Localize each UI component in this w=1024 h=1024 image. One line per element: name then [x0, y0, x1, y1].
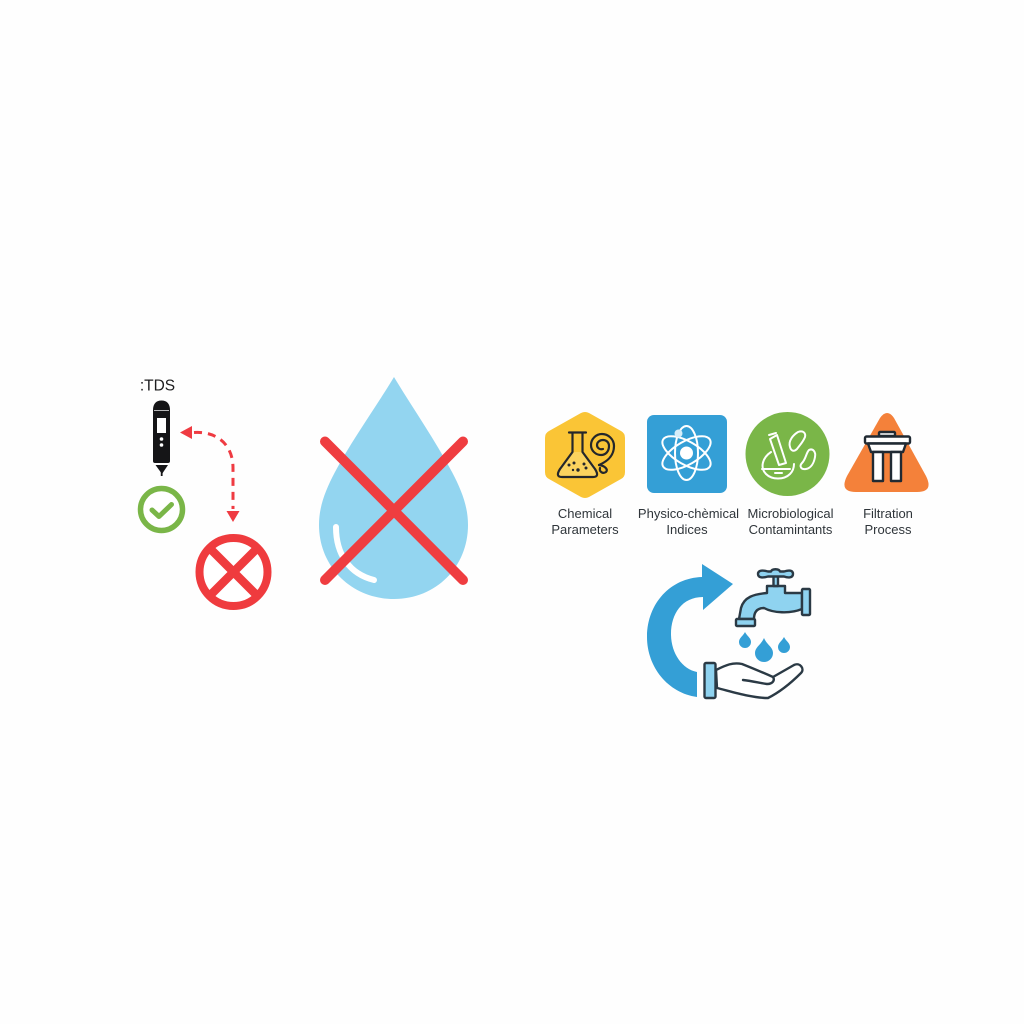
panel: filtration process [844, 413, 929, 537]
panel: TDS meter test [140, 378, 268, 606]
red cross [325, 442, 463, 580]
icon: open hand [704, 663, 802, 698]
icon: orange triangle [844, 413, 929, 492]
panel: chemical parameters [545, 412, 625, 537]
drop highlight [336, 527, 374, 580]
label: Chemical Parameters [551, 506, 619, 537]
panel: microbiological contaminants [746, 412, 834, 537]
panel: physico-chemical indices [638, 415, 739, 537]
label: Filtration Process [863, 506, 913, 537]
TDS label: :TDS [140, 378, 175, 394]
label: Filtration Process: Process [865, 522, 912, 537]
icon: red cross circle [200, 538, 268, 606]
label: Chemical Parameters: Parameters [551, 522, 619, 537]
icon: flask and spiral [558, 432, 614, 477]
label: Chemical Parameters: Chemical [558, 506, 612, 521]
arrow: dashed red two-way arrow [180, 426, 240, 522]
icon: TDS pen meter [153, 400, 170, 476]
icon: blue square [647, 415, 727, 493]
icon: atom [657, 426, 716, 480]
label: Physico-chemical Indices [638, 506, 739, 537]
label: Physico-chemical Indices: Physico-chèmical [638, 506, 739, 521]
icon: faucet [736, 569, 810, 626]
icon: water filter [865, 432, 910, 481]
label: Filtration Process: Filtration [863, 506, 913, 521]
icon: water drops [739, 632, 790, 662]
label: Microbiological Contaminants: Contamintants [749, 522, 833, 537]
label: Microbiological Contaminants [748, 506, 834, 537]
icon: green circle [746, 412, 830, 496]
panel: crossed-out water drop [319, 377, 468, 599]
icon: microscope and bacteria [762, 431, 815, 478]
icon: yellow hexagon [545, 412, 625, 498]
panel: water reuse [647, 564, 810, 698]
icon: water drop [319, 377, 468, 599]
label: Physico-chemical Indices: Indices [666, 522, 708, 537]
arrow: circular blue arrow [647, 564, 733, 697]
label: Microbiological Contaminants: Microbiological [748, 506, 834, 521]
icon: green check circle [140, 488, 182, 530]
